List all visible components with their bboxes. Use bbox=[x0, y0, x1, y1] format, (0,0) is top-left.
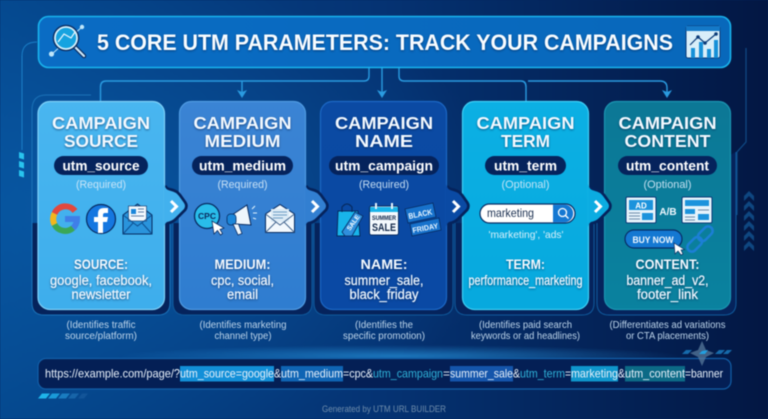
icons: channels: CPC bbox=[198, 211, 216, 221]
right circuit decoration bbox=[737, 48, 754, 251]
parameter pill: utm_source bbox=[62, 158, 140, 174]
heading: CAMPAIGN bbox=[335, 113, 433, 133]
value bbox=[50, 257, 152, 302]
status: (Optional) bbox=[644, 179, 692, 191]
value: NAME: bbox=[360, 257, 408, 272]
status: (Required) bbox=[359, 179, 409, 191]
stripes bottom left bbox=[38, 394, 88, 398]
icons: channels bbox=[194, 204, 294, 235]
heading: MEDIUM bbox=[204, 131, 280, 151]
description: medium bbox=[200, 320, 286, 342]
search examples: 'marketing', 'ads' bbox=[488, 229, 564, 241]
panel: campaign source bbox=[32, 95, 185, 315]
url bar: utm_source=google bbox=[180, 366, 274, 380]
icons: ad variations bbox=[625, 197, 714, 255]
value: SOURCE: bbox=[74, 257, 128, 272]
value bbox=[211, 257, 274, 302]
panel: campaign name bbox=[314, 102, 467, 315]
description: medium: (Identifies marketing bbox=[200, 320, 286, 331]
heading: CONTENT bbox=[624, 131, 711, 151]
icons: promotions: FRIDAY bbox=[412, 221, 439, 235]
value: banner_ad_v2, bbox=[626, 273, 708, 288]
heading bbox=[335, 113, 433, 151]
description: source: (Identifies traffic bbox=[66, 320, 136, 331]
value: cpc, social, bbox=[211, 273, 274, 288]
icons: promotions: SUMMER bbox=[372, 215, 396, 222]
title banner bbox=[38, 16, 730, 68]
icon: analytics dashboard bbox=[686, 26, 720, 58]
url bar: utm_medium bbox=[281, 366, 343, 380]
value: TERM: bbox=[506, 257, 545, 272]
url bar: & bbox=[274, 366, 281, 380]
value: CONTENT: bbox=[636, 257, 700, 272]
connector tab bbox=[446, 184, 467, 227]
description: name bbox=[343, 320, 425, 342]
status: (Required) bbox=[76, 179, 126, 191]
url bar: & bbox=[618, 366, 625, 380]
heading: CAMPAIGN bbox=[52, 113, 150, 133]
value: MEDIUM: bbox=[214, 257, 270, 272]
url bar: utm_content bbox=[625, 366, 686, 380]
description: term bbox=[471, 320, 580, 342]
parameter pill: utm_term bbox=[494, 158, 557, 174]
heading: NAME bbox=[355, 131, 413, 151]
icons: ad variations: AD bbox=[635, 202, 647, 210]
description: content: or CTA placements) bbox=[626, 331, 709, 342]
title text: 5 CORE UTM PARAMETERS: TRACK YOUR CAMPAIGNS bbox=[97, 30, 673, 55]
url bar: = bbox=[565, 366, 571, 380]
description: term: keywords or ad headlines) bbox=[471, 331, 580, 342]
value bbox=[468, 257, 582, 288]
value bbox=[344, 257, 424, 302]
value: black_friday bbox=[350, 287, 419, 302]
heading: CAMPAIGN bbox=[476, 113, 574, 133]
heading bbox=[476, 113, 574, 151]
heading bbox=[194, 113, 292, 151]
connector arrows from title to cards bbox=[100, 68, 672, 101]
heading: CAMPAIGN bbox=[618, 113, 716, 133]
icons: ad variations: A/B bbox=[659, 207, 677, 218]
left circuit decoration bbox=[19, 42, 37, 178]
parameter pill bbox=[485, 156, 566, 175]
value: performance_marketing bbox=[468, 273, 582, 288]
icons: promotions: BLACK bbox=[408, 208, 433, 221]
description: name: (Identifies the bbox=[355, 320, 413, 331]
url bar: summer_sale bbox=[450, 366, 513, 380]
url bar: & bbox=[513, 366, 520, 380]
value: summer_sale, bbox=[344, 273, 424, 288]
heading bbox=[618, 113, 716, 151]
icons: google, facebook, newsletter bbox=[53, 204, 152, 234]
description: content: (Differentiates ad variations bbox=[610, 320, 726, 331]
icon: search box bbox=[480, 204, 575, 223]
status: (Optional) bbox=[502, 179, 550, 191]
url bar: = bbox=[443, 366, 450, 380]
sparkle and stripes near url bar bbox=[682, 341, 732, 366]
icons: promotions: SALE bbox=[346, 213, 362, 232]
panel: campaign content bbox=[597, 102, 736, 315]
description: medium: channel type) bbox=[214, 331, 272, 342]
url bar: utm_campaign bbox=[373, 366, 443, 380]
url bar: marketing bbox=[571, 366, 618, 380]
url bar: utm_term bbox=[520, 366, 565, 380]
url bar: https://example.com/page/? bbox=[45, 366, 180, 380]
heading: SOURCE bbox=[64, 131, 138, 151]
description: name: specific promotion) bbox=[343, 331, 425, 342]
parameter pill: utm_medium bbox=[199, 158, 286, 174]
description: source: source/platform) bbox=[65, 331, 137, 342]
value: newsletter bbox=[72, 287, 131, 302]
value: google, facebook, bbox=[50, 273, 152, 288]
icons: promotions: SALE bbox=[372, 222, 396, 234]
heading: TERM bbox=[501, 131, 550, 151]
url bar: =cpc& bbox=[343, 366, 373, 380]
panel: campaign medium bbox=[173, 102, 326, 315]
url bar: =banner bbox=[685, 366, 723, 380]
icon: search box: marketing bbox=[487, 206, 534, 220]
description: term: (Identifies paid search bbox=[479, 320, 572, 331]
value: email bbox=[227, 287, 258, 302]
value: footer_link bbox=[637, 287, 698, 302]
panel: campaign term bbox=[455, 102, 609, 315]
connector tab bbox=[164, 184, 185, 227]
parameter pill: utm_campaign bbox=[335, 158, 433, 174]
status: (Required) bbox=[218, 179, 268, 191]
description: source bbox=[65, 320, 137, 342]
heading: CAMPAIGN bbox=[194, 113, 292, 133]
parameter pill: utm_content bbox=[626, 158, 709, 174]
icons: ad variations: BUY NOW bbox=[632, 235, 674, 246]
footer credit: Generated by UTM URL BUILDER bbox=[322, 404, 446, 415]
value bbox=[626, 257, 708, 302]
heading bbox=[52, 113, 150, 151]
connector tab bbox=[305, 184, 326, 227]
icon: magnifier with chart bbox=[49, 25, 84, 57]
icons: promotions bbox=[337, 203, 441, 236]
connector tab bbox=[588, 184, 609, 227]
description: content bbox=[610, 320, 726, 342]
url bar bbox=[38, 358, 731, 389]
